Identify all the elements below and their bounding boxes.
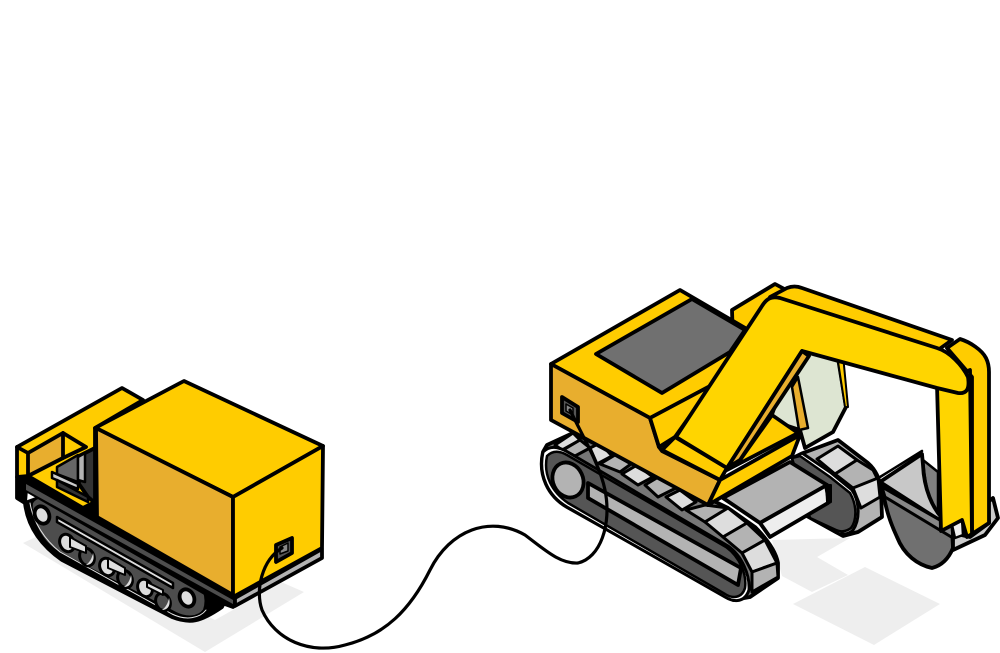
vehicle: excavator	[542, 284, 998, 601]
ground shadows: excavator	[772, 538, 940, 645]
socket: excavator	[562, 397, 578, 422]
upper body	[551, 290, 800, 505]
power socket	[276, 538, 292, 562]
engine box	[95, 381, 323, 597]
cable	[259, 410, 607, 648]
vehicle: tracked power unit	[17, 381, 323, 621]
bucket	[880, 451, 998, 568]
seat	[52, 448, 95, 503]
boom	[676, 286, 969, 468]
undercarriage	[723, 462, 831, 537]
rear deck	[17, 388, 143, 508]
ground shadow: power unit	[23, 535, 304, 652]
dipper stick	[937, 339, 989, 537]
front crawler track	[542, 433, 778, 601]
road wheels	[57, 532, 173, 613]
rear crawler track	[792, 440, 882, 536]
crawler track	[25, 490, 230, 621]
cab	[732, 284, 848, 448]
chassis band	[17, 473, 322, 607]
